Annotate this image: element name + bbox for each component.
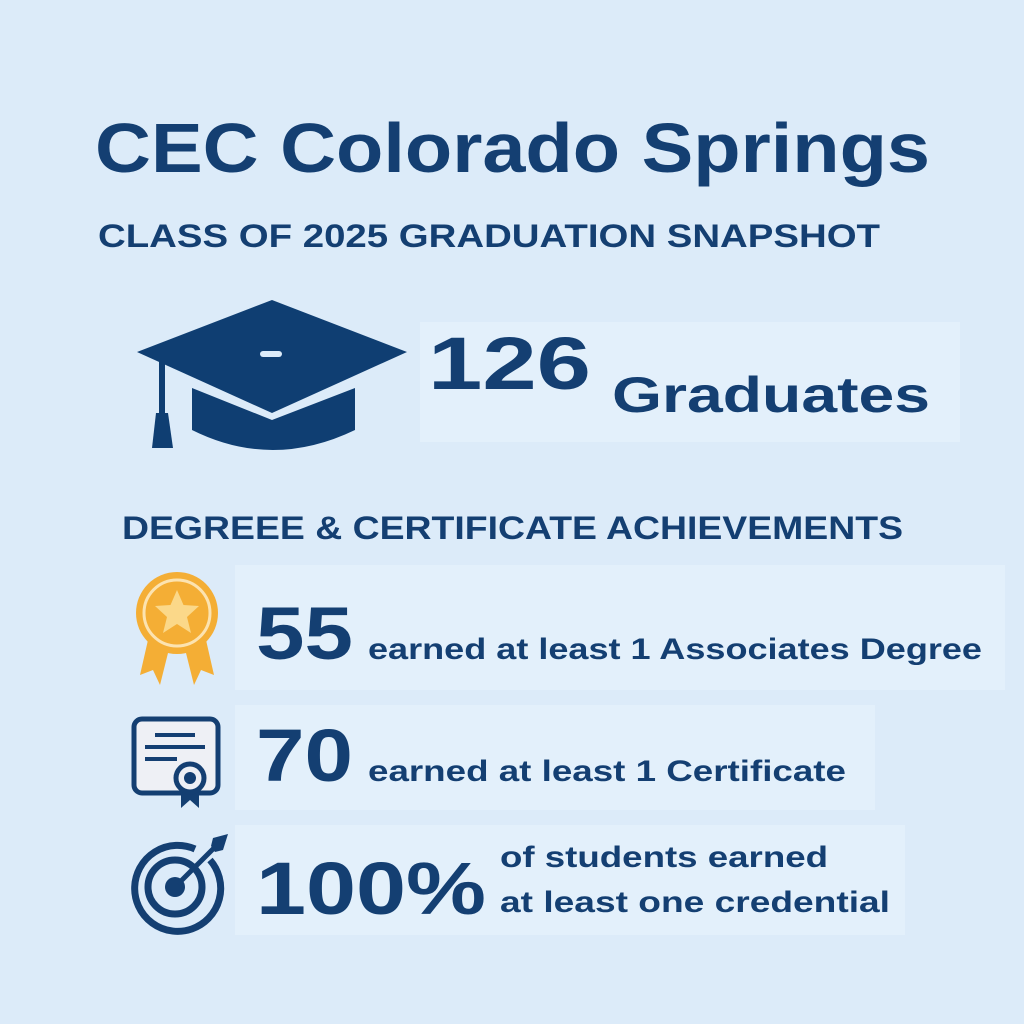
icon: certificate: [134, 719, 218, 808]
stat: 70 certificate: [256, 714, 846, 797]
stat: 100% credential: at least one credential: [500, 886, 890, 919]
stat: 55 associates: earned at least 1 Associates Degree: [368, 633, 982, 666]
title: CEC Colorado Springs: [95, 109, 930, 187]
heading: achievements: DEGREEE & CERTIFICATE ACHIEVEMENTS: [122, 510, 903, 546]
stat: 126 graduates: Graduates: [612, 367, 930, 423]
stat: 70 certificate: earned at least 1 Certificate: [368, 755, 846, 788]
stat: 126 graduates: 126: [428, 322, 591, 405]
stat: 55 associates: 55: [256, 592, 353, 675]
icon: graduation cap: [137, 300, 407, 450]
stat: 70 certificate: 70: [256, 714, 353, 797]
icon: medal: [136, 572, 218, 685]
subtitle: CLASS OF 2025 GRADUATION SNAPSHOT: [98, 218, 881, 254]
stat: 55 associates: [256, 592, 982, 675]
stat: 100% credential: [256, 841, 890, 930]
stat: 100% credential: 100%: [256, 847, 486, 930]
stat: 100% credential: of students earned: [500, 841, 828, 874]
stat: 126 graduates: [428, 322, 930, 423]
icon: target: [135, 834, 228, 931]
